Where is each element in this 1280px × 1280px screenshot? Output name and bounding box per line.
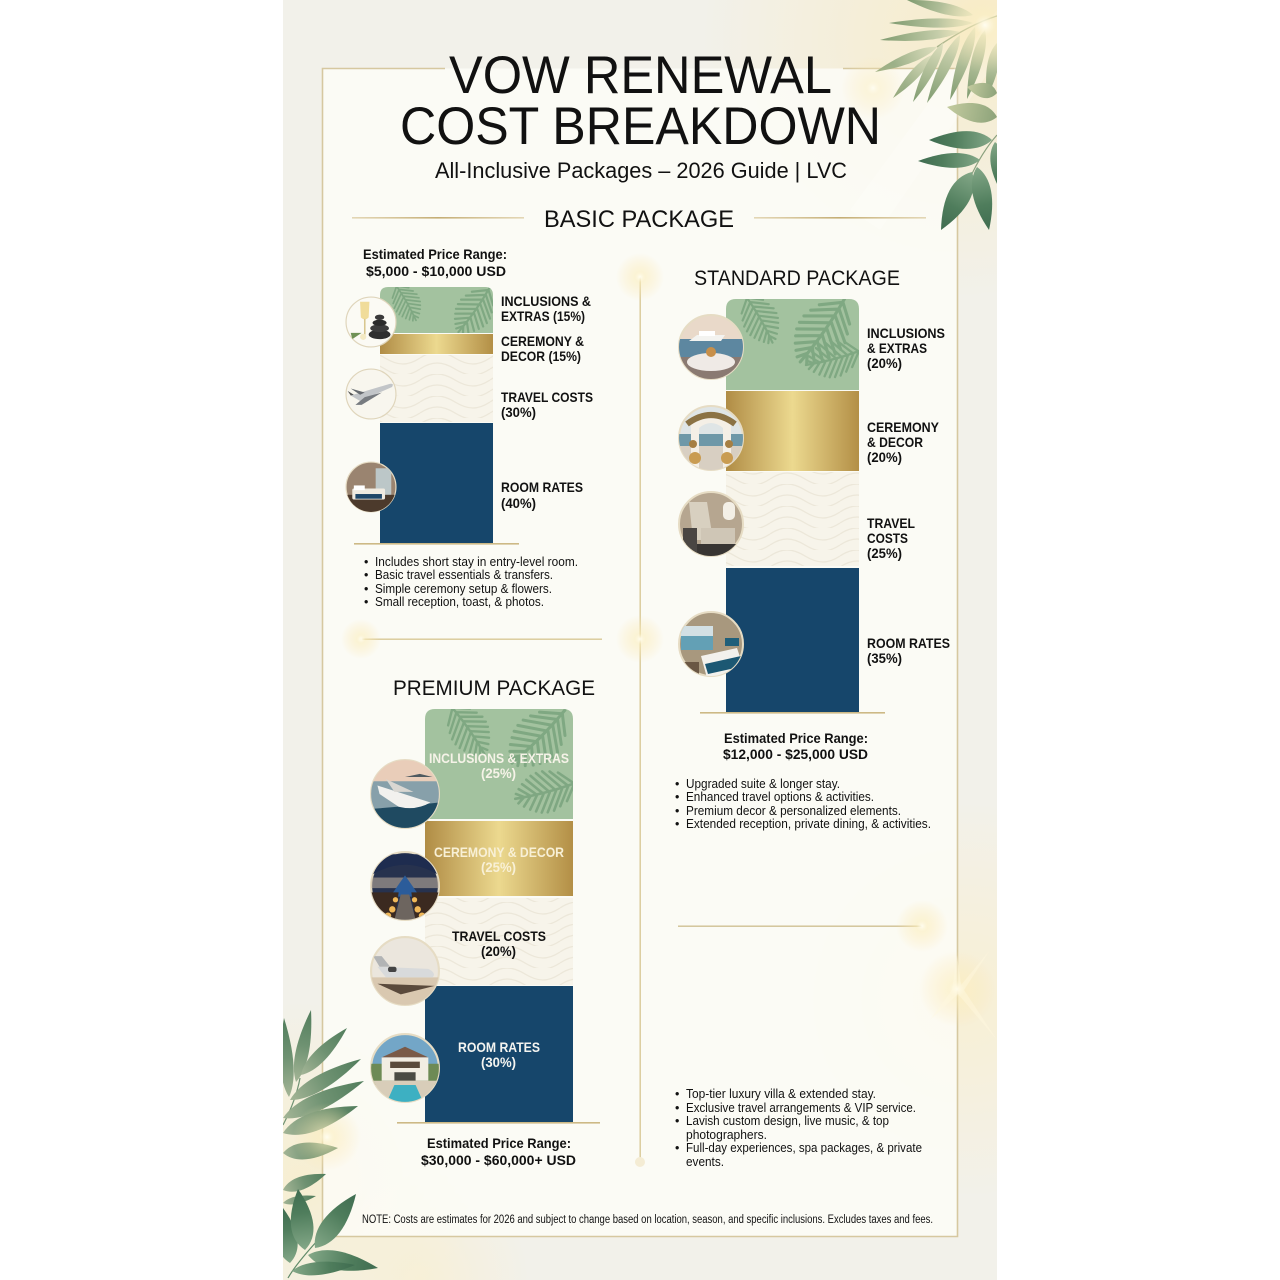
labels: standard: TRAVEL	[867, 515, 915, 531]
icon: luxury tent	[371, 852, 439, 922]
bullet list: basic: Simple ceremony setup & flowers.	[375, 582, 552, 596]
labels: standard: & DECOR	[867, 434, 923, 450]
top right foliage	[875, 0, 997, 230]
labels: basic: EXTRAS (15%)	[501, 308, 585, 324]
bullet list: standard: •	[675, 804, 679, 818]
bullet list: premium: •	[675, 1141, 679, 1155]
bullet list: standard: •	[675, 790, 679, 804]
title	[402, 56, 877, 144]
labels: premium: (25%)	[481, 765, 516, 781]
price range: basic	[364, 249, 506, 278]
price range: standard: Estimated Price Range:	[724, 730, 868, 746]
bullet list: standard: Premium decor & personalized elements.	[686, 804, 901, 818]
icon: hotel room	[346, 462, 396, 514]
stacked bar: standard	[700, 285, 885, 714]
labels: basic: (30%)	[501, 404, 536, 420]
labels: basic	[501, 293, 593, 511]
panel: basic package	[346, 206, 926, 609]
bullet list: premium: •	[675, 1101, 679, 1115]
bullet list: basic: •	[364, 555, 368, 569]
icon: champagne and stones	[346, 297, 396, 347]
icon: ocean view suite	[679, 612, 745, 678]
labels: premium: INCLUSIONS & EXTRAS	[429, 750, 569, 766]
icon: ceremony arch	[679, 406, 743, 472]
labels: standard: INCLUSIONS	[867, 325, 945, 341]
bullet list: basic: •	[364, 568, 368, 582]
icon: superyacht	[371, 760, 439, 830]
title: COST BREAKDOWN	[400, 97, 881, 156]
stacked bar: premium	[397, 694, 600, 1124]
bullet list: premium: •	[675, 1114, 679, 1128]
icon: first class seat	[679, 492, 743, 558]
poster background	[273, 0, 1033, 1280]
heading: premium package: PREMIUM PACKAGE	[393, 676, 595, 700]
labels: basic: INCLUSIONS &	[501, 293, 591, 309]
icon: yacht dining	[679, 315, 743, 381]
bullet list: premium: photographers.	[686, 1128, 767, 1142]
bullet list: standard: Upgraded suite & longer stay.	[686, 777, 840, 791]
labels: basic: ROOM RATES	[501, 479, 583, 495]
bullet list: basic: Basic travel essentials & transfers.	[375, 568, 553, 582]
icon: villa with pool	[371, 1034, 439, 1104]
title: VOW RENEWAL	[449, 46, 832, 105]
icon: airplane	[346, 369, 396, 419]
labels: basic: (40%)	[501, 495, 536, 511]
light beam	[954, 58, 988, 118]
panel: standard package	[675, 266, 950, 831]
labels: standard: (20%)	[867, 355, 902, 371]
bullet list: premium	[675, 1087, 922, 1169]
bullet list: basic: •	[364, 582, 368, 596]
panel: main frame	[322, 68, 958, 1236]
bullet list: basic: Small reception, toast, & photos.	[375, 595, 544, 609]
labels: premium: (20%)	[481, 943, 516, 959]
bottom left foliage	[283, 1010, 378, 1278]
labels: standard: CEREMONY	[867, 419, 940, 435]
bullet list: standard	[675, 777, 931, 831]
stacked bar: basic	[354, 277, 519, 545]
labels: premium: TRAVEL COSTS	[452, 928, 546, 944]
labels: standard: (35%)	[867, 650, 902, 666]
price range: standard: $12,000 - $25,000 USD	[723, 746, 868, 762]
price range: standard	[723, 733, 868, 762]
labels: premium	[429, 750, 569, 1070]
labels: premium: ROOM RATES	[458, 1039, 540, 1055]
panel: premium package	[371, 676, 922, 1169]
footnote: NOTE: Costs are estimates for 2026 and subject to change based on location, season, and specific inclusions. Excludes taxes and fees.	[362, 1214, 933, 1226]
bullet list: standard: •	[675, 817, 679, 831]
price range: basic: Estimated Price Range:	[363, 246, 507, 262]
bullet list: premium: events.	[686, 1155, 724, 1169]
labels: premium: CEREMONY & DECOR	[434, 844, 564, 860]
bullet list: premium: Lavish custom design, live music, & top	[686, 1114, 889, 1128]
labels: standard: ROOM RATES	[867, 635, 950, 651]
bullet list: premium: Full-day experiences, spa packages, & private	[686, 1141, 922, 1155]
labels: basic: CEREMONY &	[501, 333, 584, 349]
heading: standard package: STANDARD PACKAGE	[694, 266, 900, 290]
labels: premium: (30%)	[481, 1054, 516, 1070]
labels: standard: (20%)	[867, 449, 902, 465]
bullet list: standard: Extended reception, private dining, & activities.	[686, 817, 931, 831]
labels: premium: (25%)	[481, 859, 516, 875]
labels: standard: COSTS	[867, 530, 908, 546]
dividers with glowing nodes	[341, 253, 997, 1167]
labels: standard: & EXTRAS	[867, 340, 927, 356]
labels: basic: DECOR (15%)	[501, 348, 581, 364]
bullet list: basic: Includes short stay in entry-level room.	[375, 555, 578, 569]
bullet list: premium: •	[675, 1087, 679, 1101]
heading: basic package: BASIC PACKAGE	[544, 206, 734, 233]
price range: premium	[421, 1138, 576, 1168]
bullet list: premium: Top-tier luxury villa & extended stay.	[686, 1087, 876, 1101]
price range: basic: $5,000 - $10,000 USD	[366, 263, 506, 279]
price range: premium: $30,000 - $60,000+ USD	[421, 1152, 576, 1168]
labels: standard: (25%)	[867, 545, 902, 561]
bullet list: basic: •	[364, 595, 368, 609]
labels: basic: TRAVEL COSTS	[501, 389, 593, 405]
glow: bottom left light	[296, 1106, 356, 1166]
icon: private jet	[371, 937, 439, 1007]
glow: top right light	[848, 0, 997, 112]
labels: standard	[867, 325, 950, 666]
subtitle: All-Inclusive Packages – 2026 Guide | LVC	[435, 158, 847, 183]
bullet list: standard: •	[675, 777, 679, 791]
price range: premium: Estimated Price Range:	[427, 1135, 571, 1151]
bullet list: premium: Exclusive travel arrangements & VIP service.	[686, 1101, 916, 1115]
bullet list: standard: Enhanced travel options & activities.	[686, 790, 874, 804]
bullet list: basic	[364, 555, 578, 609]
